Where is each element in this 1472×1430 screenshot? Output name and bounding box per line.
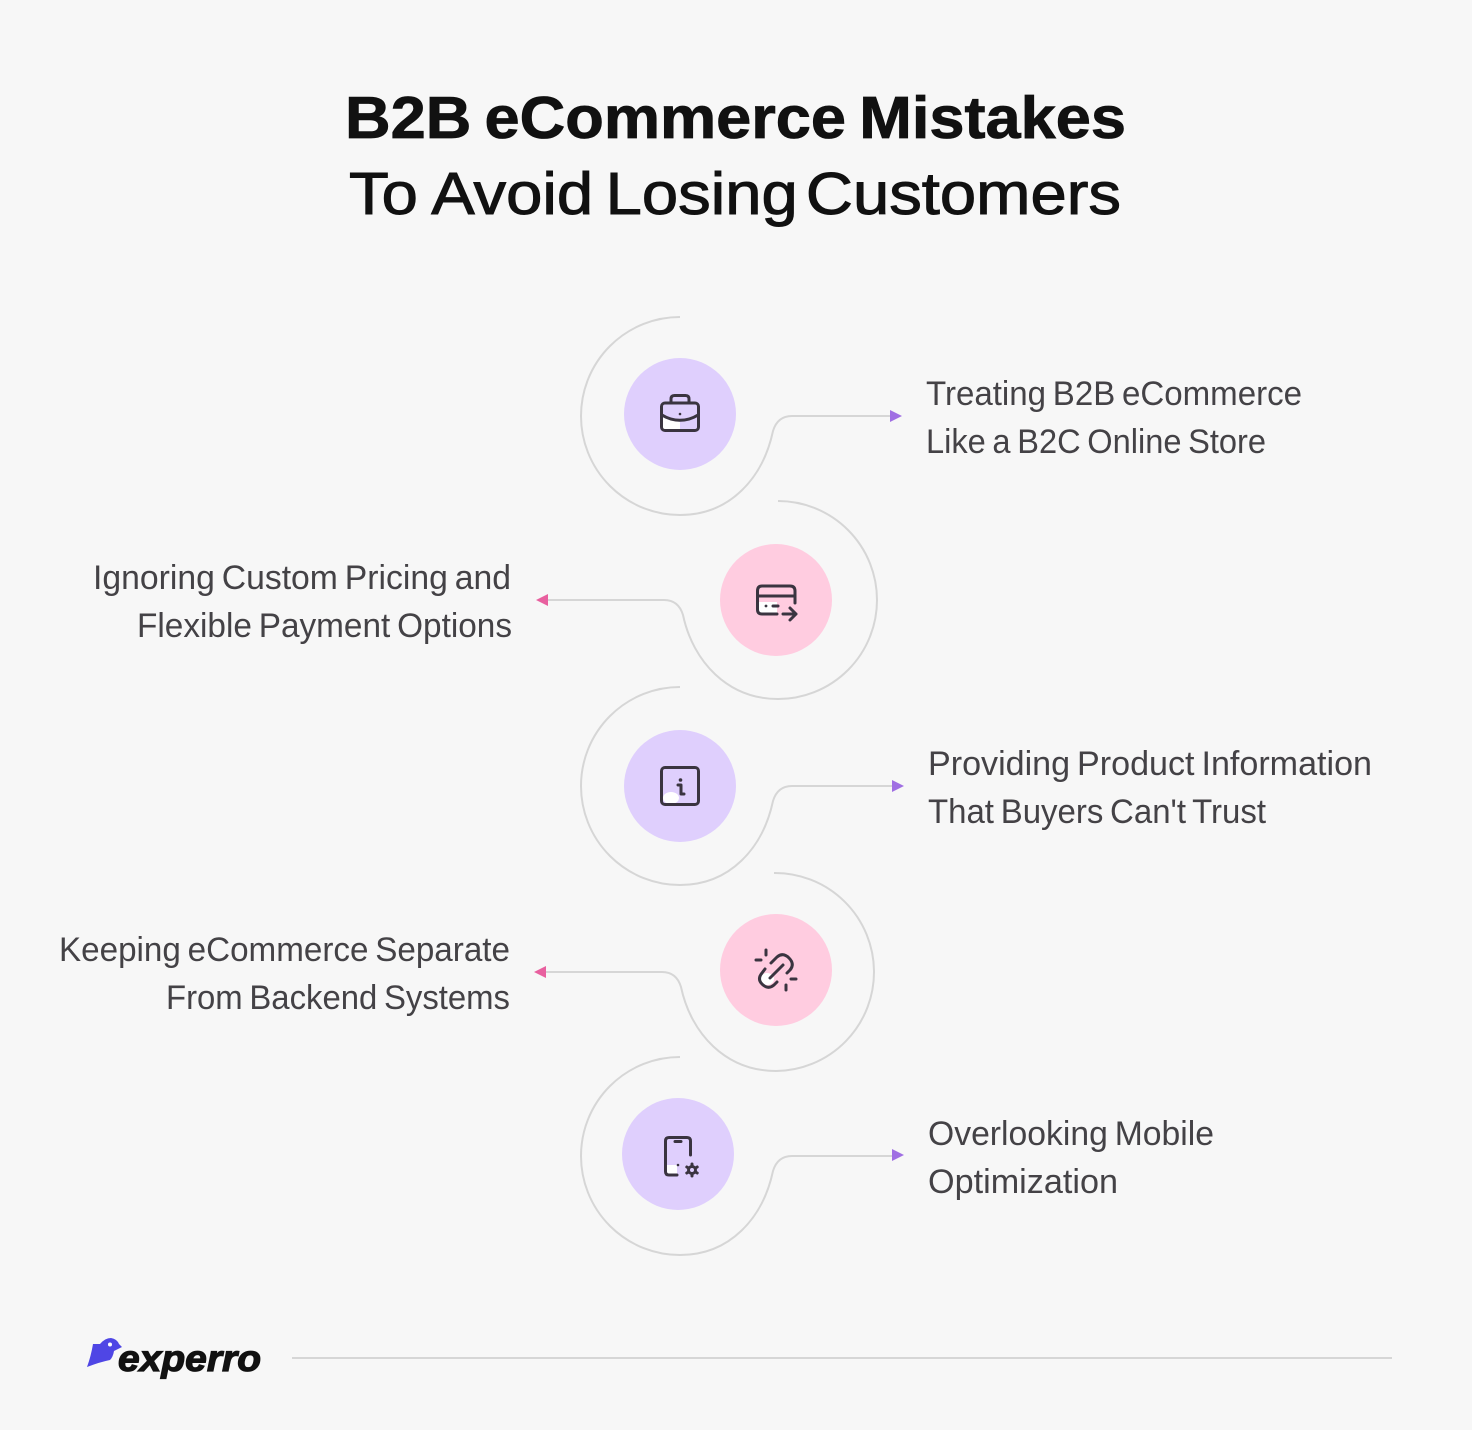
label 1: Like a B2C Online Store [926, 423, 1266, 461]
arrowhead 5 [892, 1149, 904, 1161]
icon circle 4 [720, 914, 832, 1026]
label 2 [93, 559, 512, 645]
step 3: product information [581, 687, 1372, 885]
arrowhead 4 [534, 966, 546, 978]
step 5: mobile optimization [581, 1057, 1214, 1255]
icon: card with arrow [758, 586, 796, 620]
logo: experro [87, 1338, 261, 1379]
label 3: That Buyers Can't Trust [928, 793, 1267, 831]
label 1 [926, 375, 1302, 461]
step 2: ignoring custom pricing [93, 501, 877, 699]
label 5: Overlooking Mobile [928, 1115, 1214, 1153]
label 1: Treating B2B eCommerce [926, 375, 1302, 413]
title: B2B eCommerce Mistakes [345, 85, 1126, 151]
connector arc 1 [581, 317, 890, 515]
step 4: separate systems [59, 873, 874, 1071]
label 5 [928, 1115, 1214, 1201]
icon: bird [87, 1338, 122, 1367]
connector arc 2 [548, 501, 877, 699]
icon: mobile with gear [666, 1138, 697, 1176]
step 1: treating B2B like B2C [581, 317, 1302, 515]
icon circle 1 [624, 358, 736, 470]
label 4: From Backend Systems [166, 979, 510, 1017]
connector arc 5 [581, 1057, 892, 1255]
icon circle 5 [622, 1098, 734, 1210]
connector arc 3 [581, 687, 892, 885]
label 3 [928, 745, 1372, 831]
wordmark: experro [118, 1338, 261, 1379]
arrowhead 2 [536, 594, 548, 606]
connector arc 4 [546, 873, 874, 1071]
arrowhead 1 [890, 410, 902, 422]
footer rule [292, 1357, 1392, 1359]
arrowhead 3 [892, 780, 904, 792]
icon circle 3 [624, 730, 736, 842]
label 4 [59, 931, 510, 1017]
label 5: Optimization [928, 1163, 1118, 1201]
label 3: Providing Product Information [928, 745, 1372, 783]
icon circle 2 [720, 544, 832, 656]
icon: info box [662, 768, 698, 804]
title: To Avoid Losing Customers [349, 161, 1121, 227]
label 2: Flexible Payment Options [137, 607, 512, 645]
icon: briefcase [662, 396, 698, 431]
label 4: Keeping eCommerce Separate [59, 931, 510, 969]
label 2: Ignoring Custom Pricing and [93, 559, 511, 597]
title [345, 85, 1126, 227]
icon: broken link [756, 950, 796, 990]
